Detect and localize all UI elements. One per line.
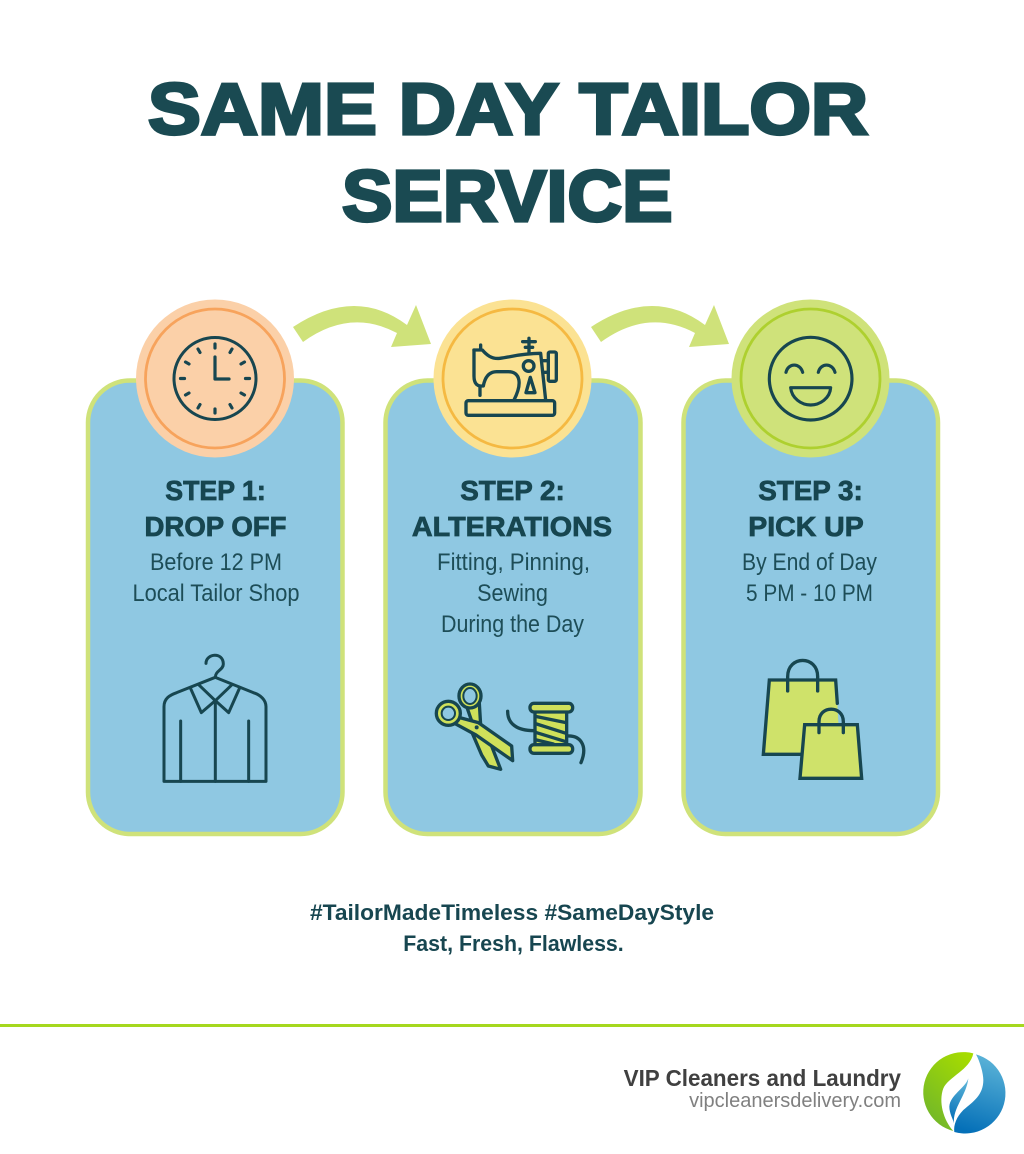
text: step 2 details: During the Day bbox=[441, 610, 585, 637]
text: step 2 heading: ALTERATIONS bbox=[412, 511, 612, 543]
text: step 3 details: By End of Day bbox=[742, 549, 878, 575]
panel: step 2 alterations bbox=[386, 380, 640, 834]
text: step 2 heading: STEP 2: bbox=[460, 475, 565, 506]
text: step 2 details bbox=[437, 548, 590, 637]
title bbox=[148, 69, 868, 237]
text: step 1 heading: DROP OFF bbox=[145, 511, 286, 542]
icon: shirt on hanger bbox=[164, 655, 266, 781]
text: company name and website: vipcleanersdelivery.com bbox=[689, 1090, 901, 1112]
text: step 3 heading: PICK UP bbox=[748, 510, 864, 542]
text: hashtags and tagline bbox=[310, 900, 714, 956]
icon: company logo bbox=[923, 1052, 1005, 1133]
icon: shopping bags bbox=[763, 660, 862, 778]
text: hashtags and tagline: Fast, Fresh, Flawless. bbox=[403, 931, 624, 956]
arrow: step 2 to step 3 bbox=[591, 305, 729, 347]
arrow: step 1 to step 2 bbox=[293, 305, 431, 347]
text: step 3 heading: STEP 3: bbox=[758, 475, 863, 506]
icon: scissors and thread spool bbox=[436, 684, 584, 769]
text: step 3 details: 5 PM - 10 PM bbox=[746, 580, 873, 606]
text: step 1 details: Before 12 PM bbox=[150, 548, 282, 575]
text: company name and website bbox=[624, 1065, 901, 1112]
text: step 2 details: Fitting, Pinning, bbox=[437, 548, 590, 575]
text: step 1 details: Local Tailor Shop bbox=[132, 579, 300, 606]
icon: sewing machine badge bbox=[434, 300, 592, 458]
text: step 3 heading bbox=[748, 475, 864, 542]
text: hashtags and tagline: #TailorMadeTimeless #SameDayStyle bbox=[310, 900, 714, 925]
title: SAME DAY TAILOR bbox=[148, 69, 868, 150]
text: step 3 details bbox=[742, 549, 878, 606]
text: step 2 heading bbox=[412, 475, 612, 543]
text: step 1 details bbox=[132, 548, 300, 606]
text: step 2 details: Sewing bbox=[477, 579, 548, 606]
text: company name and website: VIP Cleaners and Laundry bbox=[624, 1065, 901, 1091]
text: step 1 heading bbox=[145, 474, 286, 542]
icon: smiley badge bbox=[732, 300, 890, 458]
title: SERVICE bbox=[342, 156, 672, 237]
text: step 1 heading: STEP 1: bbox=[165, 474, 266, 506]
panel: step 3 pick up bbox=[684, 380, 938, 834]
panel: step 1 drop off bbox=[88, 380, 342, 834]
icon: clock badge bbox=[136, 300, 294, 458]
